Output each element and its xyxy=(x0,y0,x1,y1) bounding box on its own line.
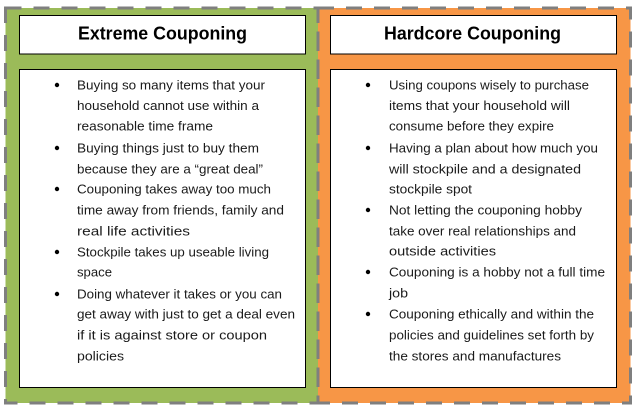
text block: hardcore couponing list: Couponing ethically and within the xyxy=(389,306,594,322)
text block: extreme couponing list: time away from friends, family and xyxy=(77,202,284,218)
text block: hardcore couponing list: stockpile spot xyxy=(389,182,472,196)
text block: extreme couponing list: space xyxy=(77,264,112,280)
text block: hardcore couponing list: outside activities xyxy=(389,244,496,258)
text block: extreme couponing list: Buying things just to buy them xyxy=(77,140,259,156)
text block: extreme couponing list: reasonable time frame xyxy=(77,118,213,134)
panel: hardcore couponing xyxy=(318,8,630,403)
text block: extreme couponing list: if it is against store or coupon xyxy=(77,328,267,342)
text block: hardcore couponing list: job xyxy=(388,286,408,300)
text block: extreme couponing list: Stockpile takes up useable living xyxy=(77,244,269,260)
text block: extreme couponing list: real life activities xyxy=(77,224,190,238)
text block: hardcore couponing list: Using coupons wisely to purchase xyxy=(389,78,589,92)
text block: extreme couponing list: Doing whatever it takes or you can xyxy=(77,286,282,302)
heading box: extreme couponing xyxy=(20,16,306,54)
text block: extreme couponing list: Buying so many items that your xyxy=(77,78,266,92)
text block: extreme couponing list xyxy=(20,70,306,388)
text block: hardcore couponing list: Not letting the couponing hobby xyxy=(389,202,582,218)
text block: hardcore couponing list: the stores and manufactures xyxy=(389,348,561,364)
text block: hardcore couponing list: will stockpile and a designated xyxy=(388,162,581,176)
panel background: orange xyxy=(318,8,630,403)
text block: extreme couponing list: because they are a “great deal” xyxy=(77,162,263,176)
heading box: extreme couponing: Extreme Couponing xyxy=(78,22,247,44)
text block: hardcore couponing list: take over real relationships and xyxy=(389,224,576,238)
text block: hardcore couponing list: consume before they expire xyxy=(389,118,554,134)
text block: extreme couponing list: policies xyxy=(77,348,124,364)
text block: extreme couponing list: household cannot use within a xyxy=(77,98,260,113)
text block: hardcore couponing list: policies and guidelines set forth by xyxy=(389,328,594,342)
text block: extreme couponing list: get away with just to get a deal even xyxy=(77,306,295,322)
text block: extreme couponing list: Couponing takes away too much xyxy=(77,182,271,196)
text block: hardcore couponing list: items that your household will xyxy=(389,98,570,113)
heading box: hardcore couponing: Hardcore Couponing xyxy=(384,22,561,44)
text block: hardcore couponing list: Couponing is a hobby not a full time xyxy=(389,264,605,280)
panel background: green xyxy=(6,8,318,403)
text block: hardcore couponing list: Having a plan about how much you xyxy=(389,140,598,156)
heading box: hardcore couponing xyxy=(330,16,616,54)
panel: extreme couponing xyxy=(6,8,318,403)
text block: hardcore couponing list xyxy=(330,70,616,388)
